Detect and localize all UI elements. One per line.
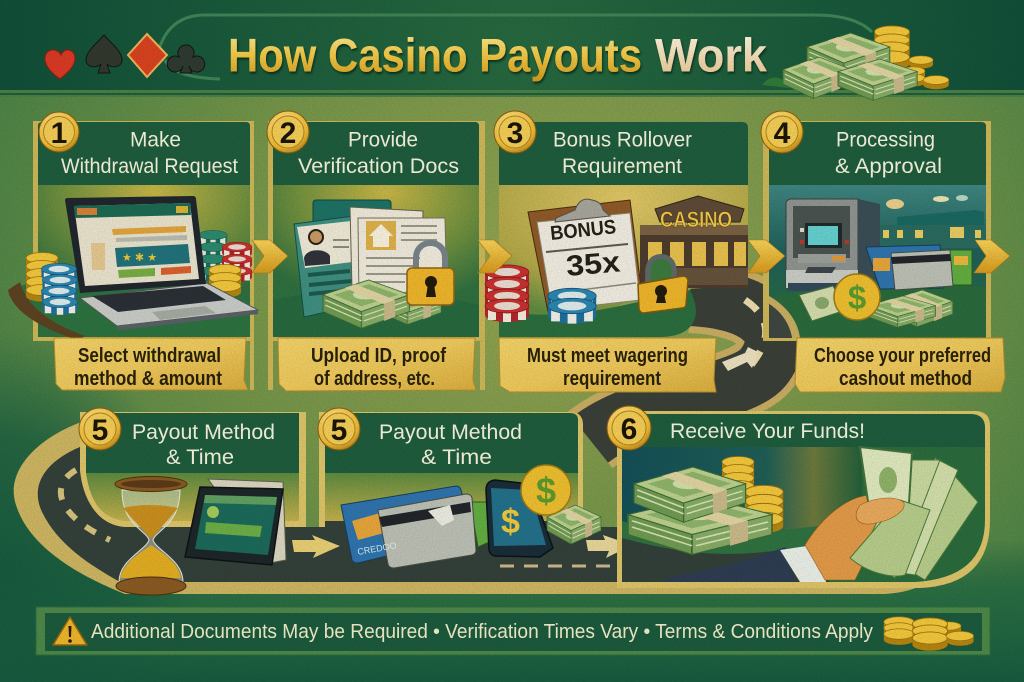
icon: laptop: ★ ✱ ★ — [122, 252, 157, 264]
caption: method & amount — [74, 368, 222, 390]
icon: payment cards — [866, 245, 972, 290]
caption: Select withdrawal — [78, 345, 221, 367]
road dashes — [500, 564, 612, 568]
heading: Make — [130, 128, 181, 152]
panel 6: receive your funds — [617, 411, 990, 588]
icon: padlock — [407, 243, 454, 305]
icon: ID cards — [294, 200, 391, 317]
arrow 2 — [478, 240, 512, 273]
step badge 5 — [79, 408, 121, 450]
heading: Provide — [348, 128, 418, 152]
panel frame — [268, 121, 485, 390]
icon: tablet — [185, 479, 286, 565]
icon: dollar coin — [521, 465, 571, 515]
panel frame — [33, 121, 254, 390]
icon: club — [167, 45, 205, 73]
icon: casino building: CASINO — [660, 207, 732, 232]
notes text: Additional Documents May be Required • Verification Times Vary • Terms & Conditions Apply — [91, 621, 873, 643]
panel frame — [617, 411, 990, 588]
icon: bonus clipboard — [528, 199, 642, 312]
step badge 2: 2 — [280, 117, 296, 150]
step badge 4: 4 — [774, 117, 791, 150]
caption: Upload ID, proof — [311, 345, 446, 367]
arrow 5 — [292, 535, 340, 558]
header band — [0, 0, 1024, 97]
icon: green and red chip stacks — [199, 230, 252, 298]
icon: dollar coin — [834, 274, 880, 320]
caption: Choose your preferred — [814, 345, 991, 367]
title: Work — [655, 28, 768, 82]
step badge 1 — [39, 112, 79, 152]
icon: ATM machine — [786, 199, 880, 291]
panel 5b: payout method and time — [319, 412, 601, 568]
title: How Casino Payouts — [228, 28, 642, 82]
icon: hourglass — [115, 476, 187, 595]
icon: payment cards: CREDOO — [357, 540, 397, 557]
icon: heart — [45, 50, 75, 79]
icon: fan of dollar bills — [850, 447, 978, 580]
caption: requirement — [563, 368, 661, 390]
icon: cash stacks — [628, 467, 772, 554]
icon: dollar coin: $ — [536, 470, 556, 511]
icon: payment cards — [341, 486, 494, 568]
panel 5a: payout method and time — [80, 412, 306, 595]
icon: padlock — [638, 256, 688, 313]
heading: Requirement — [562, 155, 682, 178]
arrow 6 — [586, 535, 632, 558]
heading — [379, 421, 522, 469]
icon: chip stacks — [485, 265, 596, 324]
step badge 4 — [761, 111, 803, 153]
heading: Bonus Rollover — [553, 128, 692, 152]
icon: dollar coin: $ — [848, 279, 866, 316]
heading: Receive Your Funds! — [670, 420, 865, 443]
caption — [795, 338, 1005, 392]
step badge 6: 6 — [621, 413, 637, 446]
panel 4: processing and approval — [763, 121, 1005, 392]
step badge 3 — [494, 111, 536, 153]
icon: sleeve and hand — [665, 495, 915, 582]
icon: smartphone: $ — [501, 503, 520, 541]
caption: of address, etc. — [314, 368, 435, 390]
icon: laptop — [65, 196, 258, 330]
heading: Verification Docs — [298, 155, 459, 178]
panel 3: bonus rollover requirement — [485, 122, 748, 392]
icon: blue chip stack — [41, 263, 78, 315]
icon: bonus clipboard: BONUS — [549, 216, 617, 245]
panel frame — [499, 122, 748, 186]
icon: playing card suits — [45, 34, 205, 79]
heading: & Time — [166, 446, 234, 469]
icon: bonus clipboard: 35x — [565, 246, 621, 283]
arrow 1 — [252, 240, 288, 273]
heading — [835, 128, 942, 178]
icon: cash stacks — [799, 286, 953, 327]
step badge 5 second — [318, 408, 360, 450]
icon: footer coins — [884, 617, 974, 651]
icon: warning triangle — [53, 617, 87, 645]
heading — [298, 128, 459, 178]
heading: & Approval — [835, 155, 942, 178]
heading — [132, 421, 275, 469]
heading: Withdrawal Request — [61, 155, 238, 178]
icon: spade — [86, 35, 122, 73]
arrow 3 — [748, 240, 785, 273]
step badge 5: 5 — [92, 414, 108, 447]
heading: Processing — [836, 128, 935, 152]
icon: casino building backdrop — [880, 195, 984, 248]
icon: documents — [350, 207, 447, 302]
icon: cash bundle — [323, 280, 441, 328]
icon: smartphone — [486, 480, 553, 557]
winding road lower section — [14, 416, 925, 594]
footer banner — [36, 607, 990, 655]
icon: coin stack — [26, 252, 58, 302]
panel 1: make withdrawal request — [8, 121, 258, 390]
heading — [61, 128, 238, 178]
road arrow — [722, 347, 758, 371]
caption: Must meet wagering — [527, 345, 688, 367]
heading — [553, 128, 692, 178]
icon: coin stacks — [722, 456, 783, 533]
panel frame — [80, 412, 306, 527]
arrow 4 — [974, 240, 1010, 273]
step badge 2 — [267, 111, 309, 153]
icon: diamond — [128, 34, 167, 77]
caption: cashout method — [839, 368, 972, 390]
icon: casino building — [640, 196, 748, 288]
caption — [499, 338, 716, 392]
step badge 3: 3 — [507, 117, 523, 150]
heading: Payout Method — [379, 421, 522, 444]
step badge 5 second: 5 — [331, 414, 347, 447]
panel frame — [763, 121, 991, 341]
caption — [278, 338, 476, 391]
icon: money and coins in header — [762, 26, 949, 100]
panel frame — [319, 412, 583, 527]
panel 2: provide verification docs — [268, 121, 485, 391]
caption — [54, 338, 248, 390]
step badge 1: 1 — [51, 117, 67, 150]
icon: cash stack — [547, 505, 601, 544]
heading: Payout Method — [132, 421, 275, 444]
winding road upper section — [590, 297, 774, 440]
step badge 6 — [607, 406, 651, 450]
heading: & Time — [421, 446, 492, 469]
